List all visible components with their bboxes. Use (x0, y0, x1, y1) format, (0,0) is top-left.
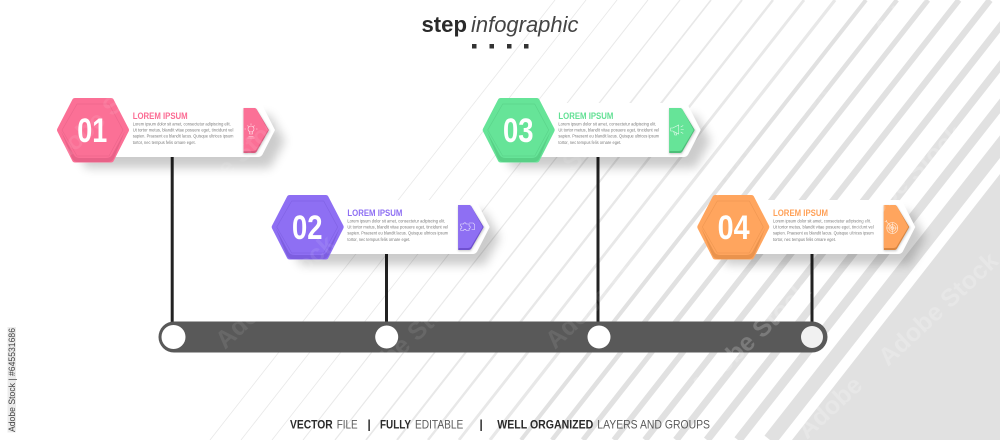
step text: tortor, nec tempus felis ornare eget. (558, 140, 621, 146)
step text (558, 122, 659, 146)
step text: sapien. Praesent eu blandit lacus. Quisque ultrices ipsum (773, 231, 874, 237)
step text: tortor, nec tempus felis ornare eget. (347, 237, 410, 243)
step 3 card (486, 101, 711, 168)
footer caption: | (480, 418, 483, 432)
arrow tab (244, 108, 270, 154)
step heading: LOREM IPSUM (133, 111, 188, 121)
watermark overlay: Adobe Stock (5, 260, 136, 384)
step heading: LOREM IPSUM (558, 111, 613, 121)
card body (110, 103, 275, 157)
timeline node 2 (375, 326, 398, 348)
step text: sapien. Praesent eu blandit lacus. Quisque ultrices ipsum (558, 134, 659, 140)
watermark overlay on grey (685, 0, 1000, 440)
watermark overlay: Adobe Stock (370, 70, 501, 194)
icon: target (885, 220, 898, 234)
step number: 04 (718, 209, 750, 247)
step text: Ut tortor metus, blandit vitae posuere eget, tincidunt vel (773, 224, 874, 230)
card body (750, 200, 915, 254)
footer caption: EDITABLE (415, 418, 464, 432)
card body (536, 103, 701, 157)
footer caption (290, 418, 710, 432)
step text: Lorem ipsum dolor sit amet, consectetur adipiscing elit. (558, 122, 656, 128)
footer caption: FULLY (380, 418, 411, 432)
watermark overlay: Adobe Stock (495, 110, 626, 234)
watermark overlay: Adobe Stock (540, 230, 671, 354)
step text: Ut tortor metus, blandit vitae posuere eget, tincidunt vel (347, 224, 448, 230)
watermark overlay: Adobe Stock (210, 230, 341, 354)
watermark overlay: Adobe Stock (702, 77, 833, 201)
timeline node 1 (162, 325, 186, 349)
title dots (472, 44, 528, 48)
arrow tab (669, 108, 696, 154)
watermark overlay on grey: Adobe Stock (685, 277, 816, 401)
icon: megaphone (671, 125, 684, 135)
step 4 card (700, 198, 925, 265)
title (422, 12, 578, 37)
step text (773, 218, 874, 243)
watermark overlay: Adobe Stock (35, 55, 166, 179)
footer caption: FILE (337, 418, 358, 432)
card shadow (499, 115, 711, 168)
title: infographic (471, 12, 578, 37)
footer caption: VECTOR (290, 418, 333, 432)
step text: sapien. Praesent eu blandit lacus. Quisque ultrices ipsum (133, 134, 233, 140)
icon: light bulb (244, 124, 258, 138)
watermark overlay: Adobe Stock (165, 102, 296, 226)
watermark overlay: Adobe Stock (340, 280, 471, 404)
step text: Lorem ipsum dolor sit amet, consectetur adipiscing elit. (347, 218, 445, 224)
step text (347, 218, 448, 243)
step text: Lorem ipsum dolor sit amet, consectetur adipiscing elit. (773, 218, 871, 224)
arrow tab (458, 205, 485, 251)
step text: tortor, nec tempus felis ornare eget. (773, 237, 836, 243)
step number: 02 (292, 209, 322, 247)
step 2 card (275, 198, 500, 265)
step heading: LOREM IPSUM (773, 208, 828, 218)
step text (133, 122, 233, 146)
timeline node 4 (801, 326, 823, 348)
step text: sapien. Praesent eu blandit lacus. Quisque ultrices ipsum (347, 231, 448, 237)
step heading: LOREM IPSUM (347, 208, 402, 218)
step text: Ut tortor metus, blandit vitae posuere eget, tincidunt vel (133, 127, 233, 133)
card shadow (73, 115, 285, 168)
card shadow (288, 212, 500, 265)
timeline connector lines (171, 155, 813, 323)
step 1 card (60, 101, 285, 168)
hexagon badge (275, 198, 341, 259)
arrow tab (884, 205, 910, 251)
background: diagonal stripes (210, 0, 1000, 440)
card shadow (713, 212, 925, 265)
title: step (422, 12, 467, 37)
step text: Ut tortor metus, blandit vitae posuere eget, tincidunt vel (558, 127, 659, 133)
hexagon badge (60, 101, 126, 162)
step number: 01 (77, 112, 107, 150)
watermark overlay on grey: Adobe Stock (873, 247, 1000, 371)
hexagon badge (700, 198, 766, 259)
timeline node 3 (588, 326, 610, 348)
step text: tortor, nec tempus felis ornare eget. (133, 140, 196, 146)
side credit: Adobe Stock | #645531686 (7, 328, 18, 432)
icon: puzzle (461, 223, 475, 230)
timeline bar (158, 322, 828, 352)
footer caption: LAYERS AND GROUPS (597, 418, 710, 432)
step text: Lorem ipsum dolor sit amet, consectetur adipiscing elit. (133, 122, 231, 128)
watermark overlay (0, 0, 833, 404)
step number: 03 (503, 112, 534, 150)
watermark overlay on grey: Adobe Stock (838, 120, 969, 244)
hexagon badge (486, 101, 552, 162)
footer caption: WELL ORGANIZED (497, 418, 593, 432)
card body (325, 200, 490, 254)
footer caption: | (368, 418, 371, 432)
